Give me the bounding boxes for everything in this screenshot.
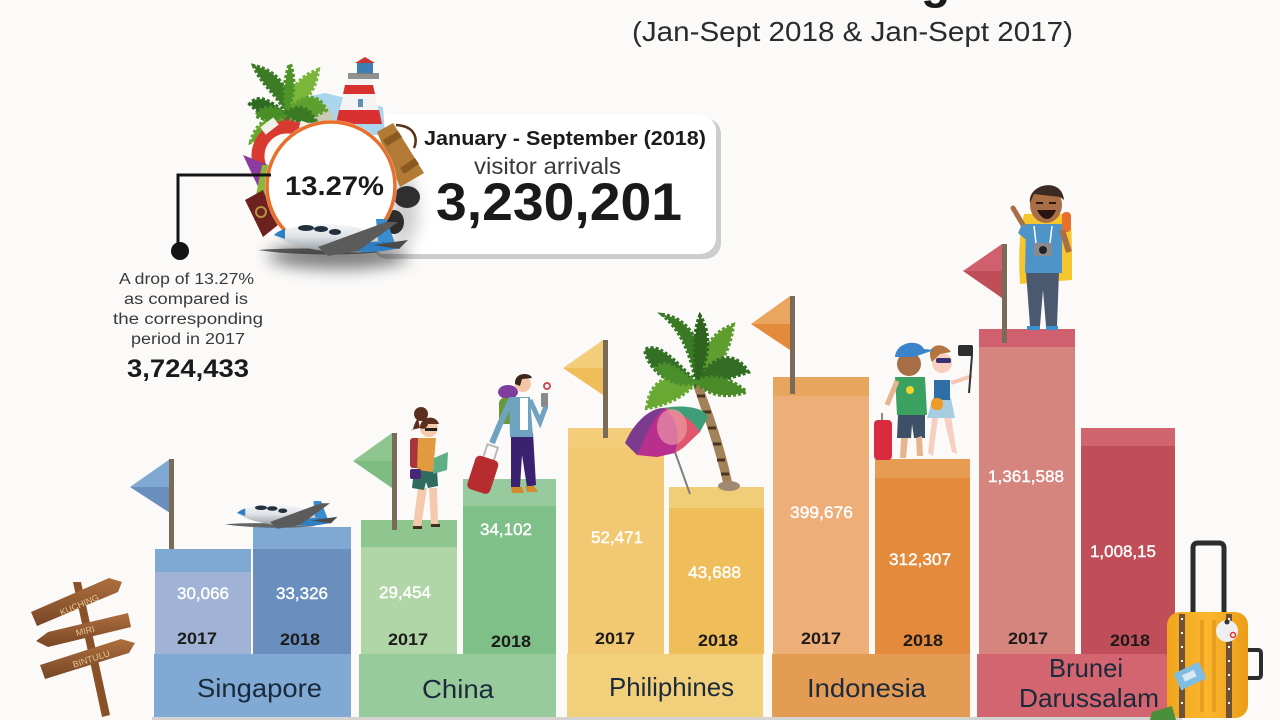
label: Indonesia: Indonesia — [807, 673, 927, 703]
bar: Philippines 2018: 43,688 — [688, 563, 741, 582]
bar: Brunei 2017: 1,361,588 — [988, 467, 1064, 486]
subtitle: (Jan-Sept 2018 & Jan-Sept 2017) — [632, 16, 1073, 47]
flag: Brunei — [963, 244, 1007, 343]
bar: Singapore 2017: 30,066 — [177, 584, 229, 603]
bar: Philippines 2017: 2017 — [595, 629, 635, 648]
flag: Singapore — [130, 459, 174, 550]
bar: Philippines 2017: 52,471 — [591, 528, 643, 547]
bar: Indonesia 2018: 312,307 — [889, 550, 951, 569]
label: Philippines — [567, 654, 763, 717]
plane — [258, 219, 408, 256]
signpost: KUCHING — [58, 592, 100, 618]
bar: Philippines 2017 — [568, 428, 664, 654]
panel: Philippines — [563, 340, 764, 717]
panel: Singapore — [130, 459, 351, 717]
label: Philippines: Philiphines — [609, 672, 734, 702]
label: China — [359, 654, 556, 717]
panel: Indonesia — [751, 296, 970, 717]
panel: Brunei Darussalam — [963, 244, 1175, 717]
icon: couple taking selfie — [874, 343, 973, 460]
bar: China 2018 — [463, 479, 556, 654]
sunglasses — [394, 186, 420, 208]
text block: 2017 comparison: period in 2017 — [131, 331, 245, 348]
icon: yellow suitcase — [1150, 543, 1261, 720]
bar: China 2017: 2017 — [388, 630, 428, 649]
palm — [250, 64, 326, 142]
callout: visitor arrivals 2018: 3,230,201 — [436, 173, 682, 232]
callout: visitor arrivals 2018: January - September (2018) — [424, 128, 706, 150]
bar: China 2018: 2018 — [491, 632, 531, 651]
label: Brunei Darussalam — [977, 653, 1170, 717]
bar: Indonesia 2017: 399,676 — [790, 503, 853, 522]
text block: 2017 comparison: the corresponding — [113, 311, 263, 328]
connector line and dot — [171, 175, 271, 260]
bar: Indonesia 2017: 2017 — [801, 629, 841, 648]
passport — [245, 190, 278, 237]
label: China: China — [422, 674, 495, 704]
bar: China 2017: 29,454 — [379, 583, 431, 602]
bar: Singapore 2017: 2017 — [177, 629, 217, 648]
label: Indonesia — [772, 654, 970, 717]
beach wedge — [243, 155, 268, 195]
bar: Philippines 2018: 2018 — [698, 631, 738, 650]
label: Singapore — [154, 654, 351, 717]
bar: Brunei 2018 — [1081, 428, 1175, 654]
signpost: MIRI — [75, 624, 96, 638]
icon: backpacker waving — [1013, 185, 1072, 330]
map — [295, 93, 385, 135]
bar: Indonesia 2018: 2018 — [903, 631, 943, 650]
bar: Singapore 2018: 33,326 — [276, 584, 328, 603]
lighthouse — [336, 57, 382, 124]
bar: Philippines 2018 — [669, 487, 764, 654]
bar: Brunei 2018: 1,008,15 — [1090, 542, 1156, 561]
percentage badge: 13.27% — [285, 171, 384, 201]
icon: travel collage with percentage badge — [243, 57, 424, 269]
text block: 2017 comparison: A drop of 13.27% — [119, 271, 254, 288]
baseline — [152, 717, 1182, 720]
icon: woman traveller with map — [410, 407, 448, 529]
life ring — [258, 127, 316, 185]
bar: Brunei 2017: 2017 — [1008, 629, 1048, 648]
text block: 2017 comparison — [113, 271, 263, 383]
flag: Indonesia — [751, 296, 795, 394]
text block: 2017 comparison: 3,724,433 — [127, 355, 249, 383]
bar: Brunei 2017 — [979, 329, 1075, 654]
label: Brunei Darussalam: Brunei — [1049, 653, 1123, 683]
callout: visitor arrivals 2018 — [368, 115, 721, 259]
bar: Singapore 2018 — [253, 527, 351, 654]
icon: small plane — [225, 501, 338, 529]
icon: palm tree — [645, 315, 748, 491]
bar: China 2017 — [361, 520, 457, 654]
bar: Indonesia 2017 — [773, 377, 869, 654]
signpost — [31, 578, 135, 717]
title — [632, 0, 1073, 47]
percentage badge — [265, 120, 397, 252]
bar: Singapore 2017 — [155, 549, 251, 654]
signpost: BINTULU — [71, 648, 111, 670]
bar: Singapore 2018: 2018 — [280, 630, 320, 649]
bar: China 2018: 34,102 — [480, 520, 532, 539]
suitcase brown — [377, 123, 424, 187]
flag: China — [353, 433, 397, 530]
panel: China — [353, 433, 556, 717]
flag: Philippines — [563, 340, 608, 438]
bar: Brunei 2018: 2018 — [1110, 631, 1150, 650]
icon: man traveller with suitcase — [466, 374, 550, 495]
label: Singapore: Singapore — [197, 673, 322, 703]
bar: Indonesia 2018 — [875, 459, 970, 654]
label: Brunei Darussalam: Darussalam — [1019, 683, 1159, 713]
text block: 2017 comparison: as compared is — [124, 291, 248, 308]
icon: beach umbrella — [625, 406, 708, 494]
callout: visitor arrivals 2018: visitor arrivals — [474, 153, 621, 179]
